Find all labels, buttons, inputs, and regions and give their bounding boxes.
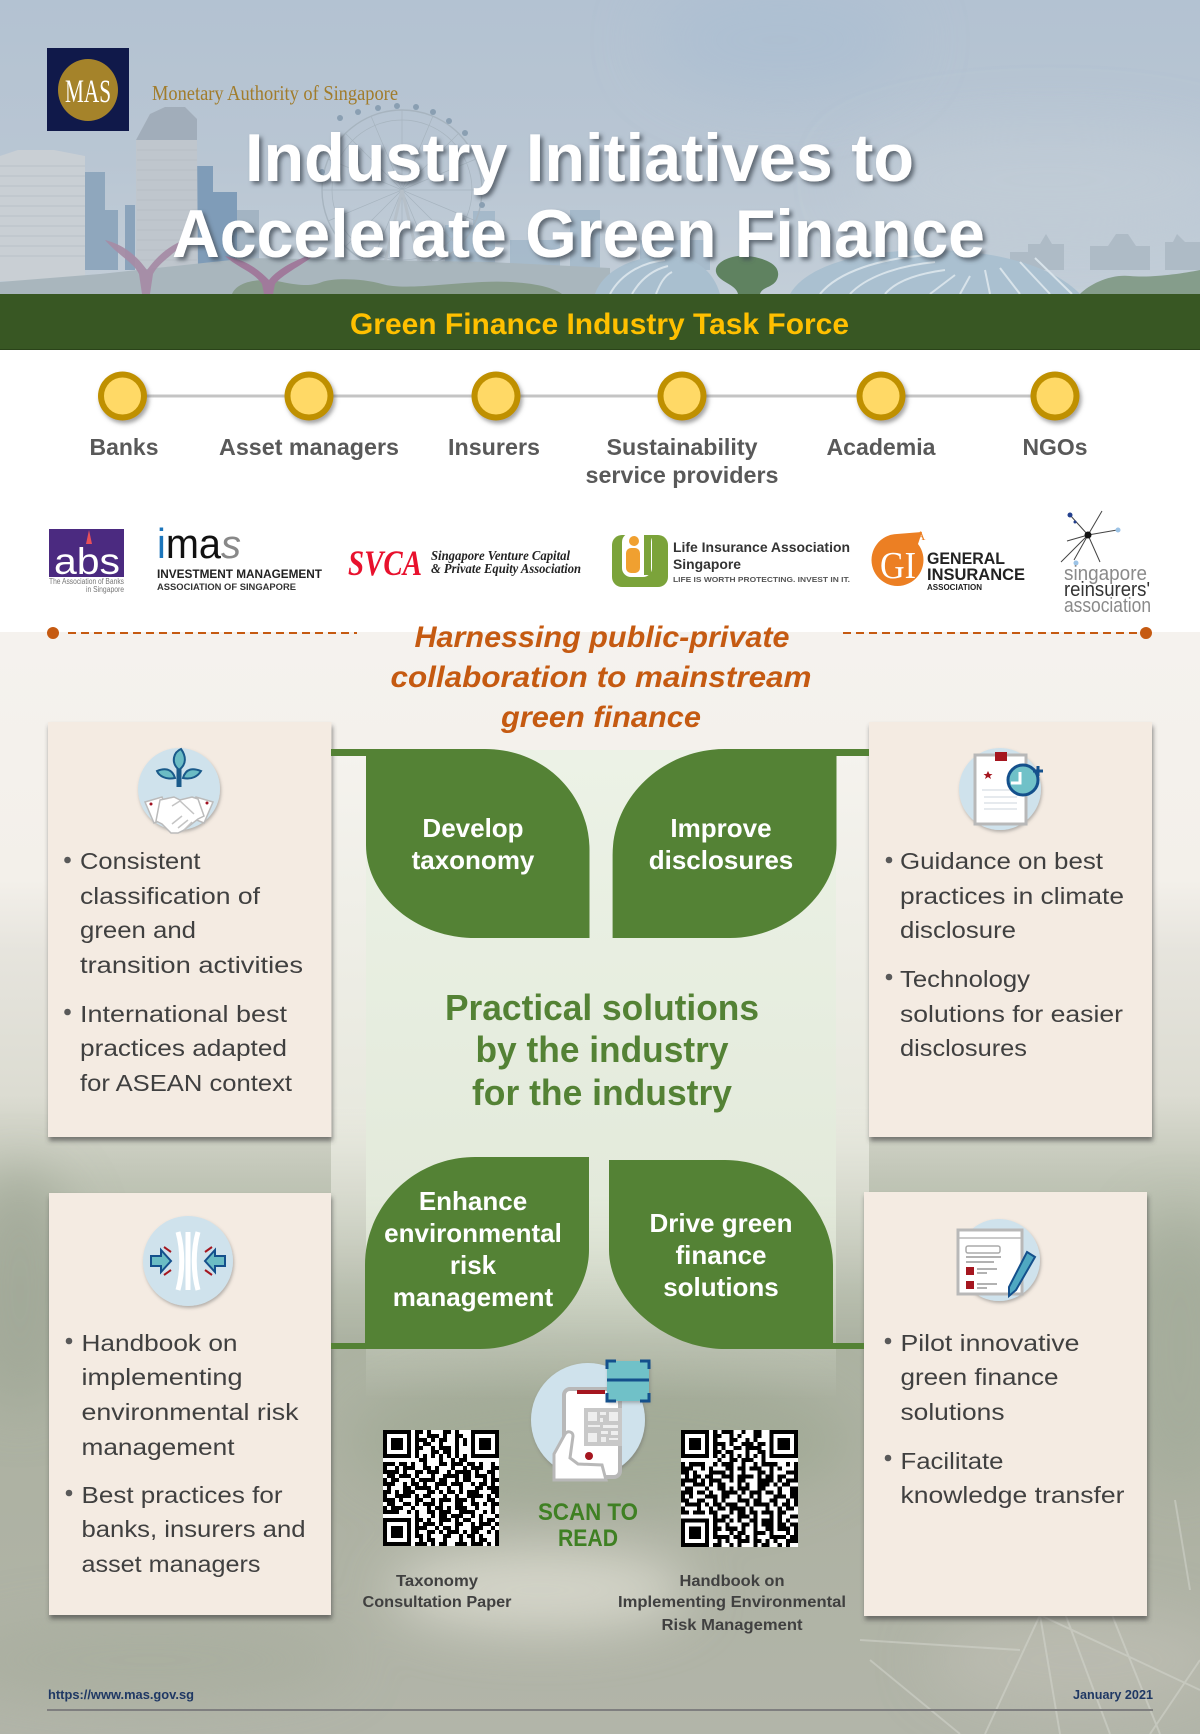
leaf: improve disclosures: disclosures [649,845,793,875]
task force banner [0,294,1200,350]
logo: General Insurance Association: ASSOCIATION [927,583,982,592]
leaf: enhance environmental risk management [331,1157,589,1349]
logo: Singapore Reinsurers Association: reinsurers' [1064,579,1150,601]
logo: Singapore Reinsurers Association: singapore [1064,563,1147,585]
panel: improve disclosures details [869,722,1152,1137]
MAS logo [47,48,129,131]
scan to read label [538,1499,638,1552]
logo: SVCA: Singapore Venture Capital [431,548,570,563]
leaf: drive green finance solutions: Drive green [649,1208,793,1238]
text: develop taxonomy bullets: Consistent [80,848,201,874]
text: green finance solutions bullets: Facilitate [900,1448,1004,1474]
text: environmental risk bullets: Best practices for [82,1482,283,1508]
logo: Singapore Reinsurers Association: association [1064,595,1151,617]
text: environmental risk bullets: environmental risk [82,1399,299,1425]
caption: handbook on implementing environmental risk management [618,1573,846,1634]
MAS wordmark: Monetary Authority of Singapore [152,81,398,105]
title: Accelerate Green Finance [172,196,985,272]
leaf: drive green finance solutions: finance [675,1240,767,1270]
footer [47,1687,1153,1711]
text: green finance solutions bullets: knowledge transfer [900,1482,1125,1508]
logo: Life Insurance Association [612,533,850,587]
logo: Life Insurance Association: Life Insurance Association [673,540,850,555]
icon: converging arrows [143,1216,233,1306]
logo: Life Insurance Association: Singapore [673,557,742,572]
icon: plant and handshake [138,748,220,833]
text: develop taxonomy bullets: transition activities [80,952,303,978]
title [172,120,985,272]
logo: General Insurance Association: GI [880,545,916,587]
icon: clipboard and clock [959,748,1043,830]
QR code: taxonomy consultation paper [383,1430,499,1546]
text: environmental risk bullets: Handbook on [82,1330,238,1356]
text: improve disclosures bullets: practices in climate [900,883,1124,909]
logo: General Insurance Association [872,528,1025,592]
node: insurers [472,372,520,420]
divider: left dashed line [47,627,357,639]
text: environmental risk bullets: management [82,1434,235,1460]
tagline [390,621,812,734]
text: develop taxonomy bullets: classification of [80,883,261,909]
panel: develop taxonomy details [48,722,332,1137]
logo: IMAS: ASSOCIATION OF SINGAPORE [157,582,296,593]
logo: General Insurance Association: GENERAL [927,549,1005,568]
caption: taxonomy consultation paper: Taxonomy [396,1573,478,1590]
caption: handbook on implementing environmental risk management: Handbook on [680,1573,784,1590]
center statement: by the industry [476,1029,728,1070]
text: green finance solutions bullets [885,1330,1125,1508]
icon: checklist and pencil [958,1219,1040,1301]
center statement: Practical solutions [445,987,759,1028]
leaf: develop taxonomy: taxonomy [412,845,535,875]
logo: IMAS [157,520,322,593]
text: develop taxonomy bullets: green and [80,917,196,943]
leaf: develop taxonomy [331,749,590,938]
logo: Singapore Reinsurers Association [1061,511,1151,617]
divider: right dashed line [843,627,1152,639]
logo: Life Insurance Association: LIFE IS WORTH PROTECTING. INVEST IN IT. [673,577,850,584]
timeline labels: Banks [90,434,158,460]
text: green finance solutions bullets: green finance [900,1364,1058,1390]
caption: handbook on implementing environmental risk management: Risk Management [662,1617,803,1634]
footer: January 2021 [1073,1687,1153,1702]
logo: IMAS: ima [157,520,222,567]
logo: SVCA: SVCA [348,543,422,583]
logo: General Insurance Association: INSURANCE [927,565,1025,584]
logo: ABS: in Singapore [86,585,124,594]
tagline: collaboration to mainstream [390,661,812,694]
scan to read label: READ [558,1525,618,1552]
leaf: enhance environmental risk management: risk [450,1250,497,1280]
logo: SVCA: & Private Equity Association [431,561,581,576]
logo: ABS: abs [54,541,120,582]
membership timeline [98,372,1080,420]
center statement [445,987,759,1113]
text: improve disclosures bullets: disclosures [900,1035,1027,1061]
leaf: enhance environmental risk management: environmental [384,1218,562,1248]
scan to read label: SCAN TO [538,1499,638,1526]
timeline labels: Academia [826,434,936,460]
tagline: Harnessing public-private [414,621,790,654]
lower background photo [0,632,1200,1734]
logo: General Insurance Association: A [916,528,926,543]
text: develop taxonomy bullets: practices adapted [80,1035,287,1061]
tagline: green finance [500,701,701,734]
logo: ABS: The Association of Banks [49,577,124,586]
node: banks [98,372,147,420]
leaf: drive green finance solutions: solutions [663,1272,779,1302]
leaf: enhance environmental risk management: Enhance [419,1186,527,1216]
timeline labels: NGOs [1022,434,1088,460]
node: NGOs [1030,372,1080,420]
timeline labels [90,434,1088,488]
timeline labels: Sustainability [606,434,758,460]
panel: green finance solutions details [864,1192,1147,1616]
text: environmental risk bullets [66,1330,306,1577]
text: improve disclosures bullets: solutions for easier [900,1001,1123,1027]
white members section [0,350,1200,632]
text: improve disclosures bullets: disclosure [900,917,1016,943]
header photo: Singapore skyline [0,0,1200,295]
text: green finance solutions bullets: solutions [900,1399,1004,1425]
timeline labels: Asset managers [219,434,399,460]
text: develop taxonomy bullets: International best [80,1001,288,1027]
text: develop taxonomy bullets [64,848,303,1096]
leaf: improve disclosures: Improve [670,813,772,843]
icon: phone scanning QR code [531,1361,649,1480]
panel: environmental risk details [49,1193,331,1615]
text: improve disclosures bullets [886,848,1124,1061]
caption: taxonomy consultation paper [362,1573,512,1611]
node: sustainability [658,372,706,420]
node: academia [856,372,906,420]
MAS logo: MAS [65,74,111,110]
task force banner: Green Finance Industry Task Force [350,308,849,341]
center statement: for the industry [472,1072,732,1113]
leaf: improve disclosures [613,749,869,938]
logo: ABS [49,529,124,594]
footer: https://www.mas.gov.sg [48,1687,194,1702]
node: asset managers [284,372,334,420]
timeline labels: service providers [586,462,778,488]
text: improve disclosures bullets: Guidance on best [900,848,1104,874]
caption: handbook on implementing environmental risk management: Implementing Environmental [618,1594,846,1611]
QR code: handbook on environmental risk management [681,1430,798,1547]
text: improve disclosures bullets: Technology [900,966,1030,992]
leaf: develop taxonomy: Develop [422,813,524,843]
text: environmental risk bullets: banks, insurers and [82,1516,306,1542]
logo: SVCA [348,543,581,583]
leaf: enhance environmental risk management: management [393,1282,554,1312]
leaf: drive green finance solutions [609,1160,864,1349]
text: develop taxonomy bullets: for ASEAN context [80,1070,293,1096]
caption: taxonomy consultation paper: Consultation Paper [362,1594,512,1611]
logo: IMAS: INVESTMENT MANAGEMENT [157,569,322,581]
timeline labels: Insurers [448,434,540,460]
text: environmental risk bullets: asset managers [82,1551,260,1577]
logo: IMAS: s [221,523,241,567]
text: environmental risk bullets: implementing [82,1364,242,1390]
text: green finance solutions bullets: Pilot innovative [900,1330,1080,1356]
title: Industry Initiatives to [245,120,914,196]
